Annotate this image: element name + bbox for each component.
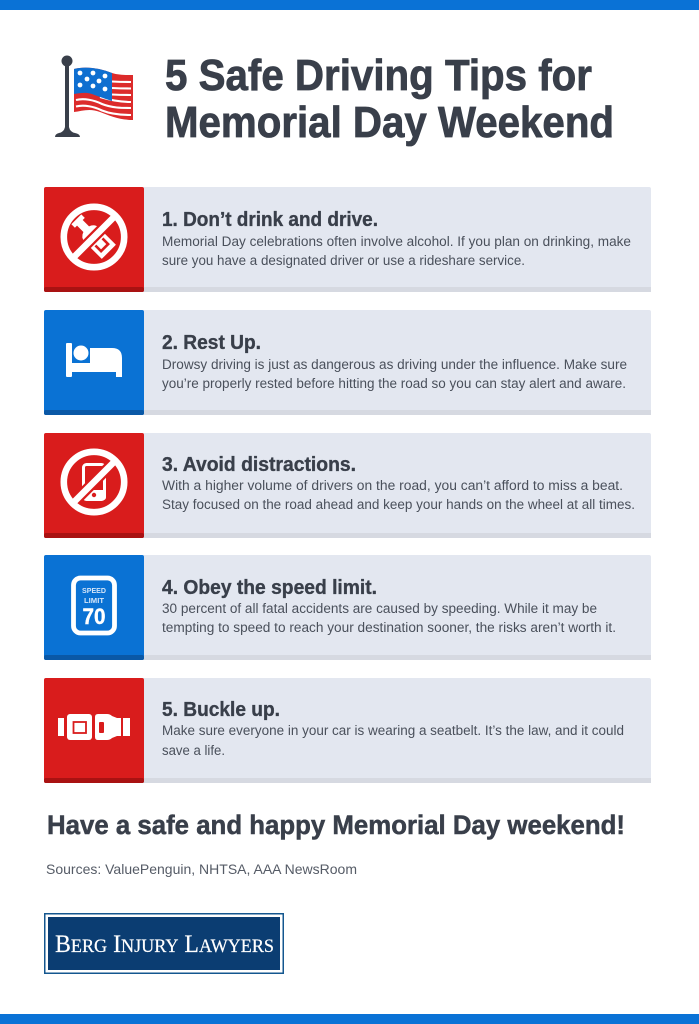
icon: speed limit sign: SPEED <box>82 586 107 595</box>
title: 5 Safe Driving Tips for <box>165 51 592 100</box>
title <box>165 51 614 147</box>
tip 3 text <box>162 454 635 512</box>
tip 4 text: 30 percent of all fatal accidents are caused by speeding. While it may be <box>162 601 597 616</box>
icon: no drinking <box>64 207 124 267</box>
icon: flag <box>55 56 133 137</box>
logo: Berg Injury Lawyers: BERG INJURY LAWYERS <box>55 931 274 958</box>
panel: tip 1 <box>44 187 651 292</box>
panel: tip 3 <box>44 433 651 538</box>
tip 3 text: Stay focused on the road ahead and keep your hands on the wheel at all times. <box>162 497 635 512</box>
top bar <box>0 0 699 10</box>
tip 1 text: 1. Don’t drink and drive. <box>162 209 378 231</box>
tip 5 text: 5. Buckle up. <box>162 699 280 721</box>
sources: Sources: ValuePenguin, NHTSA, AAA NewsRoom <box>46 861 357 877</box>
tip 1 text: sure you have a designated driver or use a rideshare service. <box>162 253 525 268</box>
icon: bed <box>66 343 122 377</box>
panel: tip 4 <box>44 555 651 660</box>
panel: tip 5 <box>44 678 651 783</box>
icon: seatbelt <box>58 714 130 740</box>
tip 1 text <box>162 209 631 268</box>
tip 4 text: tempting to speed to reach your destination sooner, the risks aren’t worth it. <box>162 620 616 635</box>
tip 2 text: 2. Rest Up. <box>162 332 261 354</box>
tip 4 text: 4. Obey the speed limit. <box>162 577 377 599</box>
tip 3 text: With a higher volume of drivers on the road, you can’t afford to miss a beat. <box>162 478 623 493</box>
tip 2 text: Drowsy driving is just as dangerous as driving under the influence. Make sure <box>162 357 627 372</box>
tip 5 text <box>162 699 624 758</box>
icon: speed limit sign: 70 <box>82 604 106 629</box>
icon: no phone <box>64 452 124 512</box>
tip 4 text <box>162 577 616 635</box>
tip 2 text: you’re properly rested before hitting the road so you can stay alert and aware. <box>162 376 626 391</box>
tip 2 text <box>162 332 627 391</box>
panel: tip 2 <box>44 310 651 415</box>
closing message: Have a safe and happy Memorial Day weekend! <box>47 810 625 840</box>
logo: Berg Injury Lawyers <box>45 914 283 973</box>
tip 3 text: 3. Avoid distractions. <box>162 454 356 476</box>
tip 5 text: save a life. <box>162 743 225 758</box>
tip 1 text: Memorial Day celebrations often involve alcohol. If you plan on drinking, make <box>162 234 631 249</box>
icon: speed limit sign <box>74 578 114 633</box>
title: Memorial Day Weekend <box>165 98 614 147</box>
bottom bar <box>0 1014 699 1024</box>
tip 5 text: Make sure everyone in your car is wearing a seatbelt. It’s the law, and it could <box>162 723 624 738</box>
icon: speed limit sign: LIMIT <box>84 596 104 605</box>
